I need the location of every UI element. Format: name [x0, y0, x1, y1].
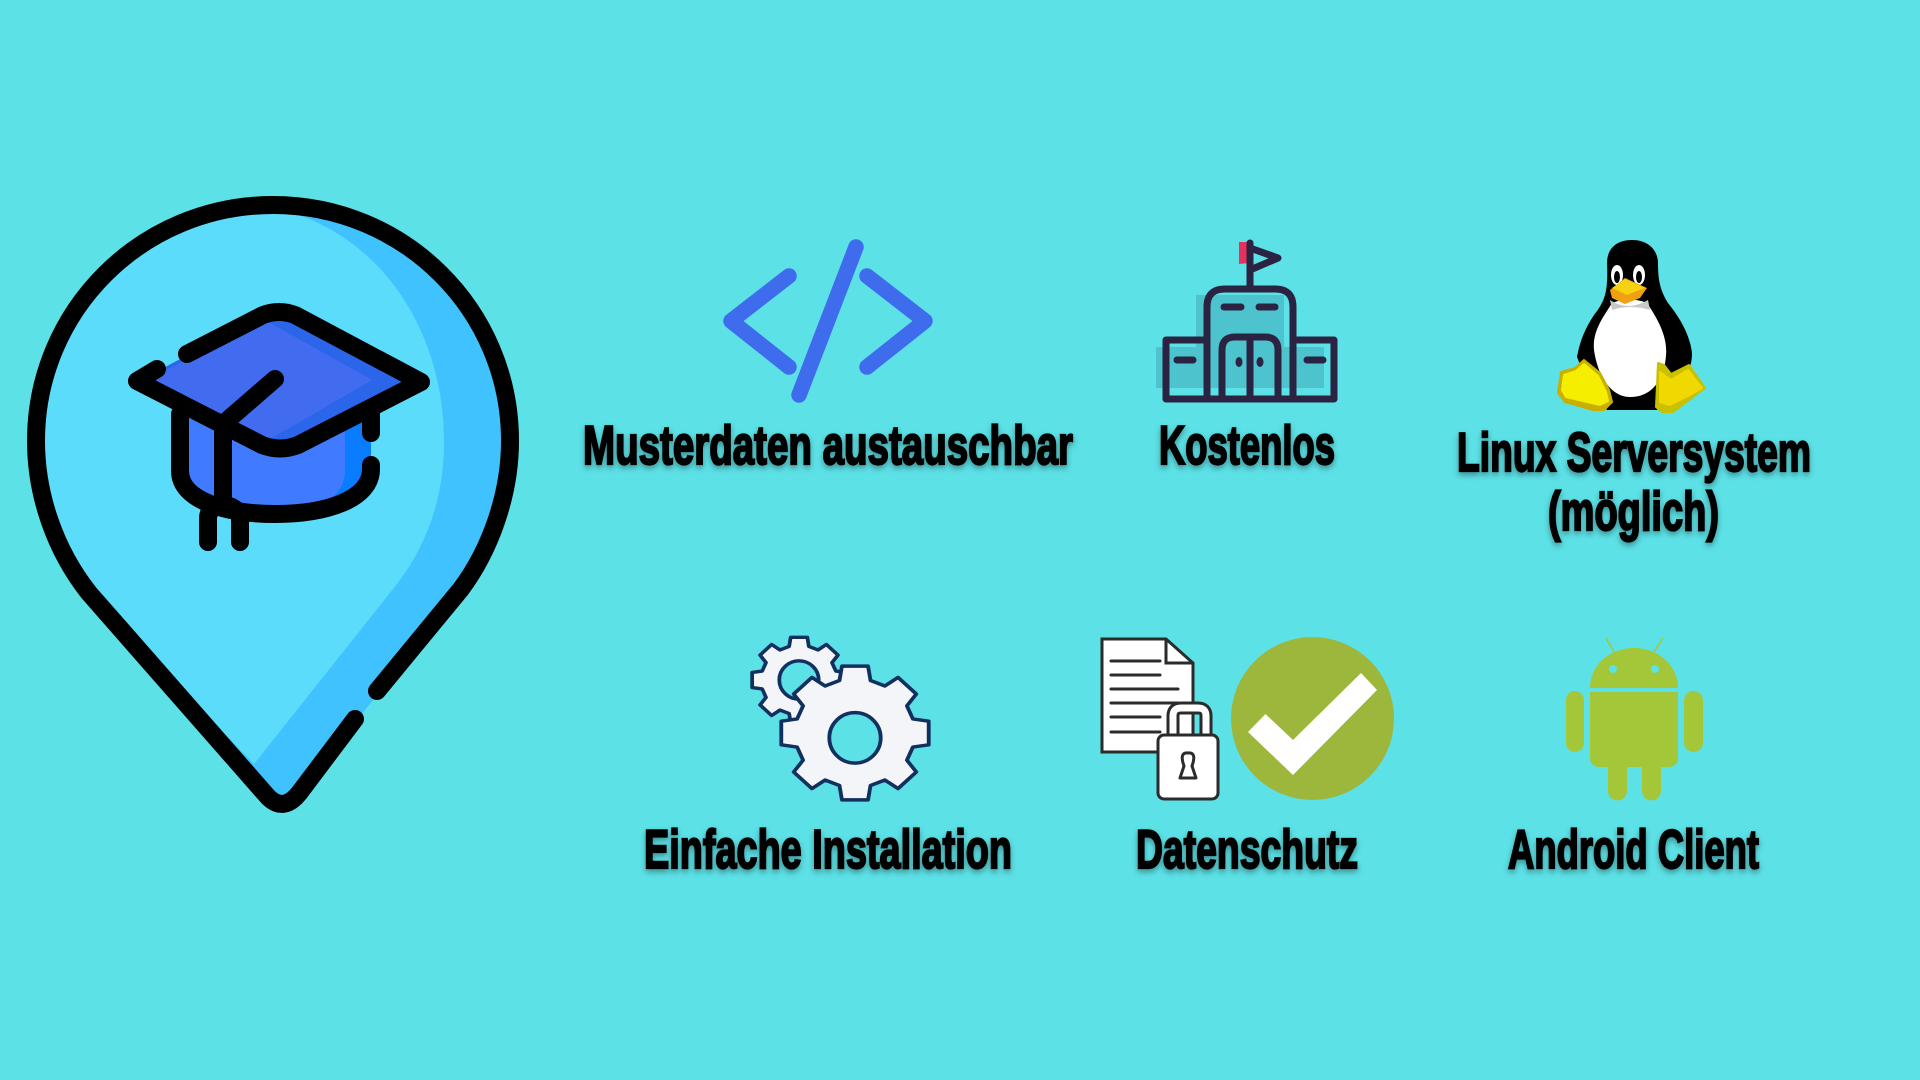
icon: gears: [752, 637, 929, 800]
graduation cap: [137, 312, 421, 542]
icon: green check circle: [1231, 637, 1394, 800]
icon: Android robot: [1566, 638, 1703, 800]
pin outline: [36, 205, 510, 804]
pin fill: [36, 205, 510, 804]
heading: Einfache Installation: Einfache Installation: [644, 818, 1012, 880]
heading: Linux Serversystem (möglich): [1457, 421, 1811, 542]
heading: Linux Serversystem (möglich): (möglich): [1548, 480, 1719, 542]
heading: Datenschutz: Datenschutz: [1136, 818, 1358, 880]
icon: document with padlock: [1102, 639, 1218, 799]
icon: code brackets: [731, 247, 925, 395]
icon: map pin with graduation cap: [36, 205, 510, 804]
icon: Linux penguin: [1558, 240, 1705, 412]
heading: Android Client: Android Client: [1508, 818, 1759, 880]
icon: school building: [1156, 242, 1334, 399]
heading: Musterdaten austauschbar: Musterdaten austauschbar: [583, 414, 1073, 476]
heading: Kostenlos: Kostenlos: [1159, 414, 1335, 476]
